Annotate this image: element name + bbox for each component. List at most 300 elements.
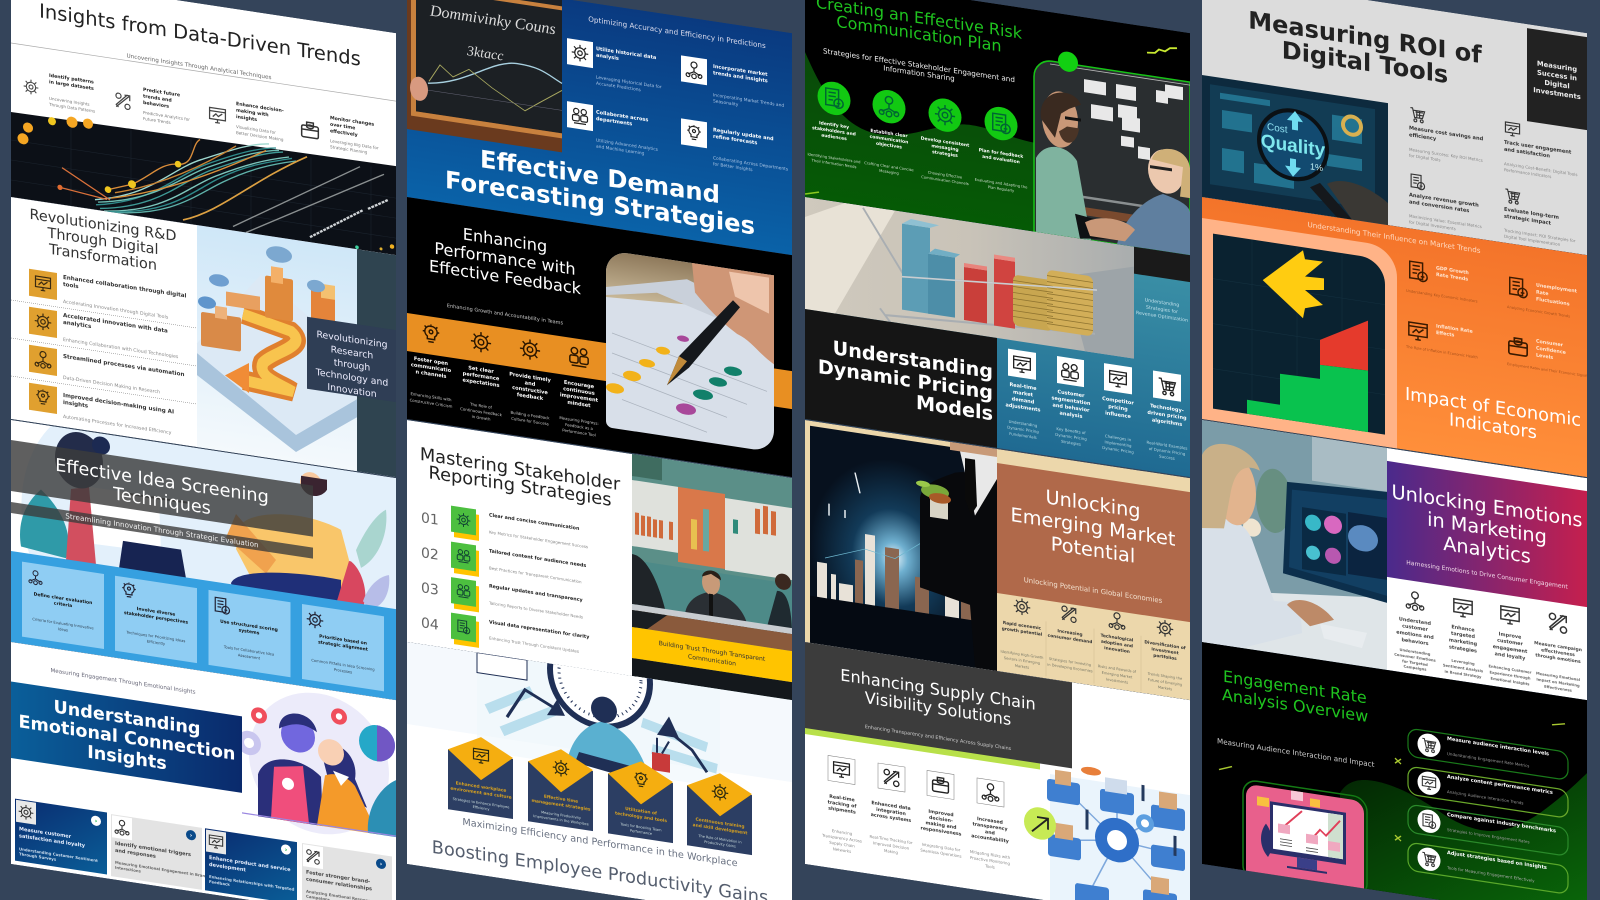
item 3: Technological	[1101, 633, 1134, 644]
item 3	[1102, 363, 1134, 455]
card 1: Measure customer	[19, 826, 72, 840]
label box: Research	[331, 344, 373, 362]
title band: Understanding	[54, 698, 200, 740]
item 4: for Better Insights	[713, 161, 753, 173]
item 4: Tracking Impact: ROI Strategies for	[1503, 227, 1576, 243]
slide: Insights from Data-Driven Trends	[11, 0, 396, 255]
item 2: Increasing	[1057, 628, 1083, 638]
column 1: communicatio	[411, 362, 452, 374]
side text: Revenue Optimization	[1136, 310, 1188, 324]
pill 1: Understanding Engagement Rate Metrics	[1447, 751, 1529, 768]
item 1: growth potential	[1002, 626, 1043, 638]
card 3: Assessment	[238, 653, 261, 661]
item 2: Performance Indicators	[1504, 167, 1551, 179]
title: Analysis Overview	[1222, 685, 1368, 726]
subtitle: Measuring Audience Interaction and Impact	[1217, 736, 1375, 769]
title: Mastering Stakeholder	[420, 444, 621, 495]
item 1: behaviors	[1401, 637, 1429, 647]
box 3: technology and tools	[615, 810, 667, 824]
photo: two colleagues	[1034, 59, 1190, 255]
item 2: Customer	[1057, 389, 1085, 399]
side text: Understanding	[1145, 297, 1179, 309]
item 2: Strategies	[1061, 439, 1081, 447]
item 1: Accurate Predictions	[596, 81, 642, 93]
step 4: Evaluating and Adapting the	[975, 178, 1028, 190]
caption band: Communication	[688, 653, 736, 668]
box 4: and skill development	[693, 822, 747, 836]
card 3: Feedback	[209, 879, 230, 887]
item: monitor: effectively	[330, 128, 358, 138]
item 2: Making	[884, 848, 899, 855]
item 1	[29, 269, 187, 323]
item 2: in Developing Economies	[1047, 663, 1093, 673]
column 3: and	[525, 380, 536, 388]
item 2	[1507, 277, 1578, 320]
item 4: Levels	[1536, 352, 1553, 361]
item 04	[421, 608, 590, 665]
slide: Revolutionizing R&D	[11, 197, 396, 477]
item 1	[1005, 348, 1041, 441]
card 1: Understanding Customer Sentiment	[19, 846, 98, 863]
item 4: Improved decision-making using AI	[63, 393, 174, 416]
item 2: Incorporate market	[713, 64, 768, 78]
item: patterns: Identify patterns	[49, 73, 94, 86]
column 1: Constructive Criticism	[410, 397, 453, 409]
card 3: ›	[285, 846, 288, 854]
item 1: Understanding	[1400, 648, 1431, 657]
step 4: Plan for feedback	[979, 147, 1024, 160]
card 2: ›	[190, 832, 193, 839]
item 3: adoption and	[1101, 639, 1133, 650]
card 1: Criteria for Evaluating Innovative	[32, 617, 94, 631]
box 4: Productivity Gains	[704, 840, 736, 849]
item 01: Clear and concise communication	[489, 512, 580, 532]
column 2: Continuous Feedback	[460, 406, 503, 417]
item 2: analytics	[63, 320, 92, 330]
card 2	[115, 576, 197, 663]
card 3: systems	[239, 627, 260, 637]
box 2	[528, 744, 593, 831]
box 3	[608, 756, 673, 843]
title: Transformation	[48, 242, 157, 274]
item 2: Track user engagement	[1504, 140, 1572, 156]
title panel: Unlocking Potential in Global Economies	[1024, 576, 1163, 605]
item 3: The Role of Inflation in Economic Health	[1405, 345, 1478, 360]
item 4	[1147, 370, 1187, 463]
column 1: Enhancing Skills with	[410, 391, 452, 402]
column 2: in Growth	[472, 414, 491, 422]
column 4: improvement	[560, 392, 599, 404]
card 1	[15, 799, 107, 874]
slide: Dynamic Pricing	[805, 197, 1190, 477]
label box: Innovation	[327, 382, 377, 400]
item 02: 02	[421, 545, 439, 564]
card 4: strategic alignment	[318, 639, 369, 653]
item 1: Measuring Success: Key ROI Metrics	[1409, 147, 1483, 163]
item: predict	[115, 88, 190, 124]
item: patterns: Uncovering Insights	[49, 96, 90, 107]
item 3: Enhancing Customer	[1489, 664, 1532, 675]
pill 3	[1408, 804, 1568, 856]
step 1: Identifying Stakeholders and	[807, 152, 861, 164]
item 3: Emerging Market	[1102, 671, 1133, 680]
card 2: Techniques for Prioritizing Ideas	[126, 630, 185, 643]
title: Indicators	[1449, 409, 1537, 444]
title: Insights from Data-Driven Trends	[39, 0, 361, 71]
item 1	[821, 754, 862, 856]
item 3: Challenges in	[1105, 433, 1132, 442]
item 3	[567, 101, 659, 159]
item 1: Enhanced collaboration through digital	[63, 275, 187, 299]
item 1: Dynamic Pricing	[1007, 425, 1039, 434]
item 3: Implementing	[1104, 439, 1132, 448]
step 1: Their Information Needs	[811, 158, 856, 169]
item: monitor: Strategic Planning	[330, 144, 368, 155]
item 4: investment	[1151, 646, 1179, 656]
label box: Revolutionizing	[316, 329, 388, 351]
green wave	[1340, 736, 1587, 900]
lime strip	[805, 727, 1040, 769]
card 3	[205, 828, 297, 900]
step 1: Identify key	[819, 120, 849, 131]
title: Reporting Strategies	[429, 462, 611, 511]
item 3: and loyalty	[1495, 651, 1526, 662]
item 01: Key Metrics for Stakeholder Engagement Success	[489, 529, 588, 549]
item 1: Consumer Emotions	[1394, 653, 1437, 663]
item: predict: Predictive Analytics for	[143, 110, 190, 122]
item 01	[421, 501, 588, 557]
step 3: Communication Channels	[921, 175, 969, 186]
item 1: for Digital Tools	[1409, 153, 1441, 163]
slide: Boosting Productivity	[407, 597, 792, 900]
title: Enhancing	[463, 225, 547, 256]
item 2: Unemployment	[1536, 282, 1578, 295]
item 2	[681, 55, 784, 115]
column 4	[559, 379, 599, 438]
item 4	[681, 118, 789, 179]
item 2	[870, 762, 913, 857]
card 2: Efficiently	[147, 640, 166, 646]
box 2: management strategies	[531, 798, 591, 813]
item 4: Digital Tool Implementation	[1504, 234, 1561, 247]
photo: woman at monitor	[1202, 420, 1387, 670]
card 1: Through Surveys	[19, 851, 57, 862]
item 2: integration	[876, 807, 906, 817]
blue band	[11, 551, 396, 700]
step 2: objectives	[876, 141, 902, 151]
item 4: refine forecasts	[713, 134, 757, 146]
item 3: engagement	[1493, 644, 1528, 655]
item 1: tools	[63, 282, 79, 290]
item 4: Success	[1159, 454, 1175, 461]
subtitle band	[11, 502, 313, 559]
item 02: Best Practices for Transparent Communication	[489, 565, 582, 584]
subtitle: Optimizing Accuracy and Efficiency in Predictions	[588, 14, 766, 50]
item 4: through emotions	[1535, 652, 1581, 665]
step 4: Plan Regularly	[988, 185, 1015, 193]
item 04: Enhancing Trust Through Consistent Updates	[489, 635, 579, 654]
column 3	[509, 371, 551, 427]
card 4: Prioritize based on	[319, 634, 367, 647]
item 3: Competitor	[1102, 396, 1134, 407]
item: predict: trends and	[143, 93, 172, 104]
item 1: Supply Chain	[829, 840, 855, 849]
item 3: Dynamic Pricing	[1102, 445, 1134, 455]
item: decisions: making with	[236, 107, 269, 118]
callout box: Digital	[1544, 79, 1570, 91]
item 1: analysis	[596, 53, 619, 62]
item 1: Understanding	[1009, 419, 1038, 428]
slide: Effective Idea Screening	[11, 420, 396, 700]
item 3: and conversion rates	[1409, 199, 1469, 214]
title block: Enhancing Supply Chain	[840, 665, 1036, 714]
item 1: Sectors in Emerging	[1004, 656, 1040, 665]
item 1	[1394, 589, 1437, 673]
item 4: Markets	[1158, 685, 1172, 691]
item 4: Automating Processes for Increased Efficiency	[63, 414, 172, 436]
title block: Visibility Solutions	[865, 688, 1011, 729]
card 3: Use structured scoring	[220, 619, 278, 633]
subtitle: Strategies for Effective Stakeholder Engagement and	[823, 46, 1015, 84]
box 3: Performance	[630, 829, 652, 836]
item 2: Leveraging	[1451, 659, 1475, 666]
slide: Engagement Rate	[1202, 642, 1587, 900]
item 3: Emotional Insights	[1491, 677, 1530, 687]
column 2: performance	[463, 371, 500, 383]
item 4: of Dynamic Pricing	[1149, 446, 1186, 456]
title block: Understanding	[833, 336, 993, 383]
item 1: Enhancing	[832, 828, 853, 836]
item 1: tracking of	[828, 799, 857, 810]
title: Effective Idea Screening	[55, 456, 269, 508]
item 3: Effects	[1436, 330, 1454, 339]
item 4: Measure campaign	[1534, 640, 1582, 653]
item 4	[1534, 611, 1582, 694]
title block	[805, 642, 1072, 768]
item: decisions: Enhance decision-	[236, 101, 284, 114]
step 2: Crafting Clear and Concise	[864, 161, 914, 173]
item 2: Strategies for Investing	[1049, 657, 1091, 667]
item 1: shipments	[828, 806, 856, 816]
item 4	[1503, 189, 1576, 249]
item 4: Increased	[977, 816, 1003, 826]
box 1: environment and culture	[450, 786, 512, 801]
item 4: and	[985, 829, 995, 837]
subtitle band: Streamlining Innovation Through Strategic Evaluation	[65, 511, 259, 549]
item 4: accountability	[971, 833, 1009, 845]
box 1: Enhanced workplace	[456, 780, 506, 794]
photo: magnifier: Quality	[1261, 131, 1326, 162]
item 03	[421, 573, 584, 628]
column 1	[11, 0, 396, 900]
item 1: Networks	[833, 846, 851, 854]
title: Effective Feedback	[429, 256, 582, 298]
item 2: in Brand Strategy	[1445, 670, 1482, 679]
item 4	[970, 777, 1011, 872]
title: Effective Demand	[480, 144, 720, 209]
item 2: Seasonality	[713, 98, 739, 108]
item 1: Transparency Across	[821, 832, 862, 844]
item 2	[1443, 597, 1484, 680]
column 3: feedback	[517, 392, 544, 402]
title panel: Analytics	[1443, 532, 1531, 568]
item 4: Evaluate long-term	[1504, 207, 1559, 221]
card 1: Ideas	[58, 627, 68, 633]
item 4: Employment Rates and Their Economic Significance	[1507, 362, 1598, 380]
item 3: Experience through	[1490, 670, 1531, 681]
title: Performance with	[434, 239, 576, 279]
title band	[11, 682, 242, 793]
item 2: Improved Decision	[873, 840, 910, 851]
item 2	[29, 307, 179, 360]
item 3: Data-Driven Decision Making in Research	[63, 375, 160, 395]
item 4: transparency	[972, 821, 1008, 833]
item 2: Enhanced data	[871, 800, 911, 812]
subtitle: Maximizing Efficiency and Performance in the Workplace	[462, 817, 738, 869]
item 02: Tailored content for audience needs	[489, 548, 586, 569]
item 2: Analyzing Cost-Benefit: Digital Tools	[1504, 161, 1578, 177]
column 3: Culture for Success	[511, 416, 549, 426]
title panel: Emerging Market	[1011, 503, 1176, 551]
item 3: for Digital Investments	[1409, 219, 1456, 231]
item 2: segmentation	[1052, 395, 1091, 407]
item 2: across systems	[871, 812, 911, 824]
image: data trend chart	[11, 105, 396, 255]
title panel: Unlocking	[1045, 485, 1141, 523]
step 2: Establish clear	[870, 128, 908, 140]
item: predict: behaviors	[143, 100, 169, 110]
card 2: Involve diverse	[137, 606, 175, 618]
item 1	[1409, 107, 1484, 169]
peach panel	[1202, 218, 1397, 448]
photo: magnifier: Cost	[1267, 122, 1288, 136]
item 3: Integrating Data for	[922, 842, 961, 853]
illustration: worker and clock	[407, 597, 792, 805]
item: decisions	[210, 97, 284, 142]
green stairs	[1247, 352, 1368, 432]
column 1: Foster open	[414, 356, 448, 367]
item 1: Identifying High-Growth	[1001, 650, 1043, 660]
item 2: Fluctuations	[1536, 296, 1570, 308]
step 1: stakeholders and	[812, 125, 856, 138]
illustration: email monitor	[1243, 779, 1367, 900]
arrow badge	[1024, 805, 1056, 842]
item 3: Risks and Rewards of	[1098, 664, 1137, 674]
item 3: influence	[1105, 410, 1131, 420]
item 2: Analyzing Economic Growth Trends	[1507, 305, 1570, 319]
item 4	[1507, 334, 1598, 380]
item 2: trends and insights	[713, 70, 768, 84]
green wave	[805, 52, 1034, 232]
column 4: Measuring Progress:	[559, 415, 599, 426]
column 4: mindset	[567, 400, 591, 409]
title: Forecasting Strategies	[445, 165, 755, 241]
item 1: demand	[1012, 396, 1035, 406]
item 3: Streamlined processes via automation	[63, 354, 184, 378]
label box	[307, 316, 388, 397]
item 03: Regular updates and transparency	[489, 583, 584, 604]
card 4: Foster stronger brand-	[306, 870, 370, 885]
orange band with icons	[407, 313, 792, 409]
item 1	[567, 38, 662, 96]
pill 4	[1408, 842, 1568, 894]
slide: Enhancing Performance	[407, 197, 792, 477]
card 4	[302, 604, 384, 691]
slide: Supply Chain	[805, 642, 1190, 900]
pill 3: Strategies to Improve Engagement Rates	[1447, 827, 1530, 844]
item 4: Real-World Examples	[1147, 440, 1187, 451]
item 2: and behavior	[1053, 402, 1090, 414]
card 3: Enhance product and service	[209, 855, 291, 873]
yellow arrow	[1263, 244, 1324, 321]
green dot	[1058, 50, 1078, 73]
box 3: Utilization of	[625, 806, 657, 817]
column 4	[1202, 0, 1598, 900]
box 1	[448, 732, 513, 819]
step 3: Develop consistent	[921, 135, 970, 149]
caption band	[632, 627, 792, 682]
card 1: satisfaction and loyalty	[19, 833, 86, 849]
illustration: two people	[11, 420, 396, 613]
item 2: consumer demand	[1048, 633, 1092, 645]
item 4	[29, 383, 174, 437]
item 1: Rapid economic	[1003, 620, 1042, 632]
title panel: in Marketing	[1427, 508, 1547, 549]
step 2	[864, 86, 914, 178]
photo: chalkboard: Dommivinky Couns	[429, 2, 556, 38]
card 4: Processes	[334, 668, 352, 675]
item 2: analysis	[1060, 410, 1082, 420]
title: Engagement Rate	[1223, 667, 1367, 707]
item 1	[1406, 261, 1478, 304]
slide: Effective Demand Forecasting	[407, 0, 792, 255]
item 3: decision-	[929, 815, 953, 824]
item 4: Regularly update and	[713, 127, 774, 142]
item 4: effectiveness	[1541, 647, 1575, 658]
column 3	[805, 0, 1190, 900]
item: decisions: Visualizing Data for	[236, 124, 276, 135]
item 3	[1098, 610, 1137, 686]
item: patterns: Through Data Patterns	[48, 102, 95, 114]
slide: Risk Communication	[805, 0, 1190, 255]
pill 2: Analyze content performance metrics	[1447, 774, 1553, 796]
step 3	[921, 95, 970, 186]
item 1: Measure cost savings and	[1409, 125, 1484, 143]
illustration: logistics network	[1047, 761, 1190, 900]
item 2: and satisfaction	[1504, 147, 1550, 160]
item 4: portfolios	[1153, 653, 1177, 662]
item 4: Consumer	[1536, 338, 1564, 349]
slide: Emotions Analytics	[1202, 420, 1587, 700]
item 2: marketing	[1449, 637, 1478, 648]
label box: through	[334, 357, 370, 374]
item: monitor	[300, 116, 378, 154]
step 1	[807, 78, 861, 170]
item: patterns: in large datasets	[49, 79, 94, 92]
column 3: Building a Feedback	[510, 410, 550, 421]
photo: pen on checklist	[606, 250, 774, 452]
photo: chalkboard: 3ktacc	[466, 43, 504, 65]
item 3	[1409, 174, 1482, 235]
item 4: Diversification of	[1144, 639, 1186, 651]
item 4: Mitigating Risks with	[970, 849, 1011, 860]
item 1: GDP Growth	[1436, 265, 1469, 276]
photo: magnifier: 1%	[1310, 161, 1323, 173]
item 2	[1047, 604, 1093, 673]
item 3: Inflation Rate	[1436, 323, 1473, 335]
item 3: Improved	[928, 809, 954, 818]
item 2: Key Benefits of	[1056, 426, 1086, 435]
